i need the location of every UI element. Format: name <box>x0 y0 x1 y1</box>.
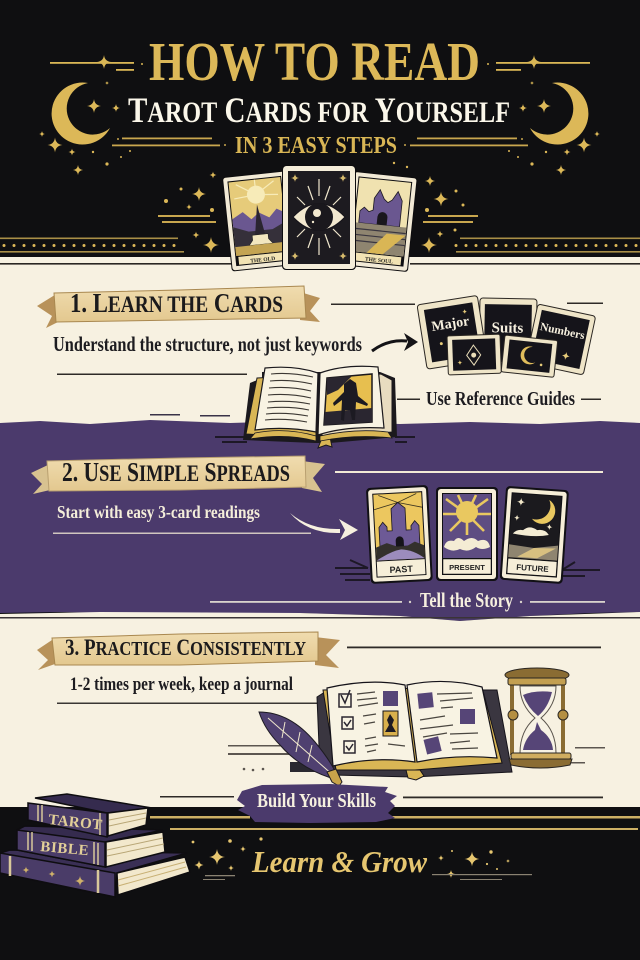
arrow: to spread cards <box>290 513 358 540</box>
checklist boxes <box>339 690 355 753</box>
icon: stacked books <box>0 794 190 897</box>
divider line <box>347 646 601 648</box>
divider lines <box>53 471 603 534</box>
book: bottom <box>0 850 190 897</box>
stars: left of Learn & Grow <box>192 837 263 880</box>
card: center tarot, eye <box>282 165 356 270</box>
dotted border band right <box>456 238 640 253</box>
icon: left crescent moon <box>52 83 110 145</box>
icon: purple quill <box>259 712 342 786</box>
stars: header left sparkle field <box>39 81 131 175</box>
stars: right of Learn & Grow <box>432 850 532 880</box>
step 3 group <box>0 617 640 798</box>
card: Major <box>417 295 487 369</box>
label: PRESENT <box>449 563 485 572</box>
header group <box>0 31 640 272</box>
dashes around Use Reference Guides <box>397 398 601 400</box>
divider lines around Tell the Story <box>210 601 605 603</box>
card: Suits: Suits <box>491 320 524 337</box>
text: Learn & Grow: Learn & Grow <box>251 844 427 879</box>
stars: around header cards <box>164 162 464 253</box>
book: top <box>28 794 152 837</box>
torn ink marks <box>150 414 230 416</box>
journal lines <box>357 692 478 752</box>
panel: step 1 cream background <box>0 257 640 427</box>
divider line <box>57 702 319 704</box>
card: Major: Major <box>430 314 470 335</box>
journal thumbnails <box>383 691 475 754</box>
label: PAST <box>389 564 414 575</box>
flourish: left title ornament <box>50 55 143 71</box>
ribbon: step 2 heading <box>31 456 325 494</box>
panel: footer background <box>0 807 640 960</box>
panel: header background <box>0 0 640 262</box>
ribbon: step 3 heading: 3. PRACTICE CONSISTENTLY <box>65 635 306 660</box>
rule under purple band <box>0 617 640 618</box>
ribbon: step 1 heading: 1. LEARN THE CARDS <box>70 288 283 318</box>
stars: header right sparkle field <box>508 81 600 175</box>
card: Present <box>436 487 498 581</box>
badge: Build Your Skills <box>237 784 397 823</box>
icon: open journal <box>317 681 512 780</box>
ink brush behind book <box>215 436 415 443</box>
dotted border band left <box>0 238 184 253</box>
icon: open reference book <box>243 366 397 448</box>
card label: THE OLD <box>250 256 276 265</box>
cream section top rule <box>0 263 640 265</box>
card: Numbers <box>526 304 596 375</box>
cards: major, suits, numbers <box>417 295 596 377</box>
card: right tarot, cathedral <box>344 171 418 272</box>
icon: right crescent moon <box>530 83 588 145</box>
ink rays behind cards <box>335 560 600 580</box>
text: step 2 description: Start with easy 3-card readings <box>57 502 260 522</box>
book: top: TAROT <box>48 812 103 834</box>
text: step 1 description: Understand the structure, not just keywords <box>53 332 362 356</box>
title: How to Read: HOW TO READ <box>149 31 480 92</box>
card: symbol <box>447 334 501 375</box>
footer group <box>0 784 640 897</box>
flourish: lines beside cards <box>158 215 478 223</box>
text: step 3 description: 1-2 times per week, keep a journal <box>70 675 293 695</box>
panel: step 3 cream background <box>0 612 640 812</box>
ribbon: step 3 heading <box>37 632 340 670</box>
book: middle <box>17 826 165 867</box>
label: FUTURE <box>516 563 550 574</box>
ribbon: step 2 heading: 2. USE SIMPLE SPREADS <box>62 457 290 487</box>
badge: Build Your Skills: Build Your Skills <box>257 790 376 812</box>
panel: step 2 purple background <box>0 420 640 621</box>
card: left tarot, obelisk <box>222 170 295 272</box>
step 2 group <box>31 456 605 612</box>
subtitle: Tarot Cards for Yourself: TAROT CARDS FOR YOURSELF <box>128 90 510 130</box>
flourish: right title ornament <box>487 55 590 71</box>
icon: hourglass <box>505 668 572 768</box>
text: Tell the Story: Tell the Story <box>420 588 513 612</box>
card label: THE SOUL <box>365 257 393 265</box>
card: Suits <box>479 298 537 369</box>
book: middle: BIBLE <box>40 839 90 859</box>
divider lines <box>57 302 603 375</box>
ink wash behind journal <box>228 745 605 772</box>
tagline: In 3 Easy Steps: IN 3 EASY STEPS <box>235 133 397 159</box>
ribbon: step 1 heading <box>37 286 320 328</box>
card: Past <box>366 485 433 584</box>
flourish: tagline lines <box>112 138 528 146</box>
card: crescent <box>501 335 558 377</box>
card: Future <box>500 486 569 584</box>
card: Numbers: Numbers <box>539 321 586 342</box>
step 1 group <box>37 286 603 448</box>
footer gold rules <box>150 816 640 830</box>
divider lines around Build Your Skills <box>160 796 603 798</box>
arrow: to category cards <box>372 333 418 351</box>
text: Use Reference Guides: Use Reference Guides <box>426 388 575 410</box>
